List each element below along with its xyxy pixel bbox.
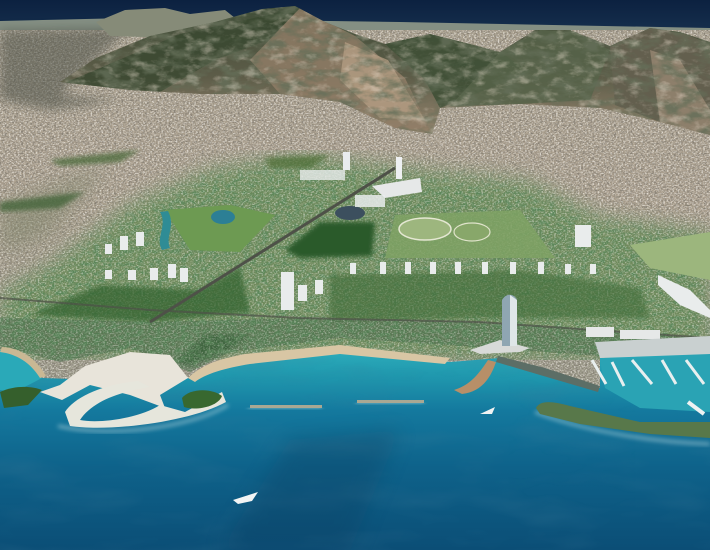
yacht offshore	[233, 492, 258, 504]
central park and stadium	[160, 152, 710, 280]
central waterfront tower	[470, 295, 530, 354]
marina basin	[600, 355, 710, 412]
mountain range	[50, 0, 710, 140]
wooded strips	[285, 222, 375, 258]
lagoon	[0, 352, 42, 392]
highways	[0, 168, 710, 338]
surf halo around the islands	[58, 403, 710, 444]
deep shadow	[220, 430, 400, 550]
western peninsula	[0, 347, 226, 428]
eastern green breakwater	[536, 402, 710, 438]
coastal strip, dark road corridor	[0, 318, 684, 372]
sky	[0, 0, 710, 34]
offshore breakwaters	[250, 400, 424, 408]
yacht near shore	[480, 407, 495, 414]
marina buildings and yachts	[586, 327, 710, 414]
sea	[0, 340, 710, 550]
distant horizon haze	[0, 18, 710, 42]
city fabric	[0, 28, 710, 430]
green masterplan zone	[0, 150, 710, 375]
beach and shoreline	[188, 345, 600, 394]
shaded foot of the mountains	[0, 28, 130, 110]
white residential blocks	[105, 170, 710, 318]
